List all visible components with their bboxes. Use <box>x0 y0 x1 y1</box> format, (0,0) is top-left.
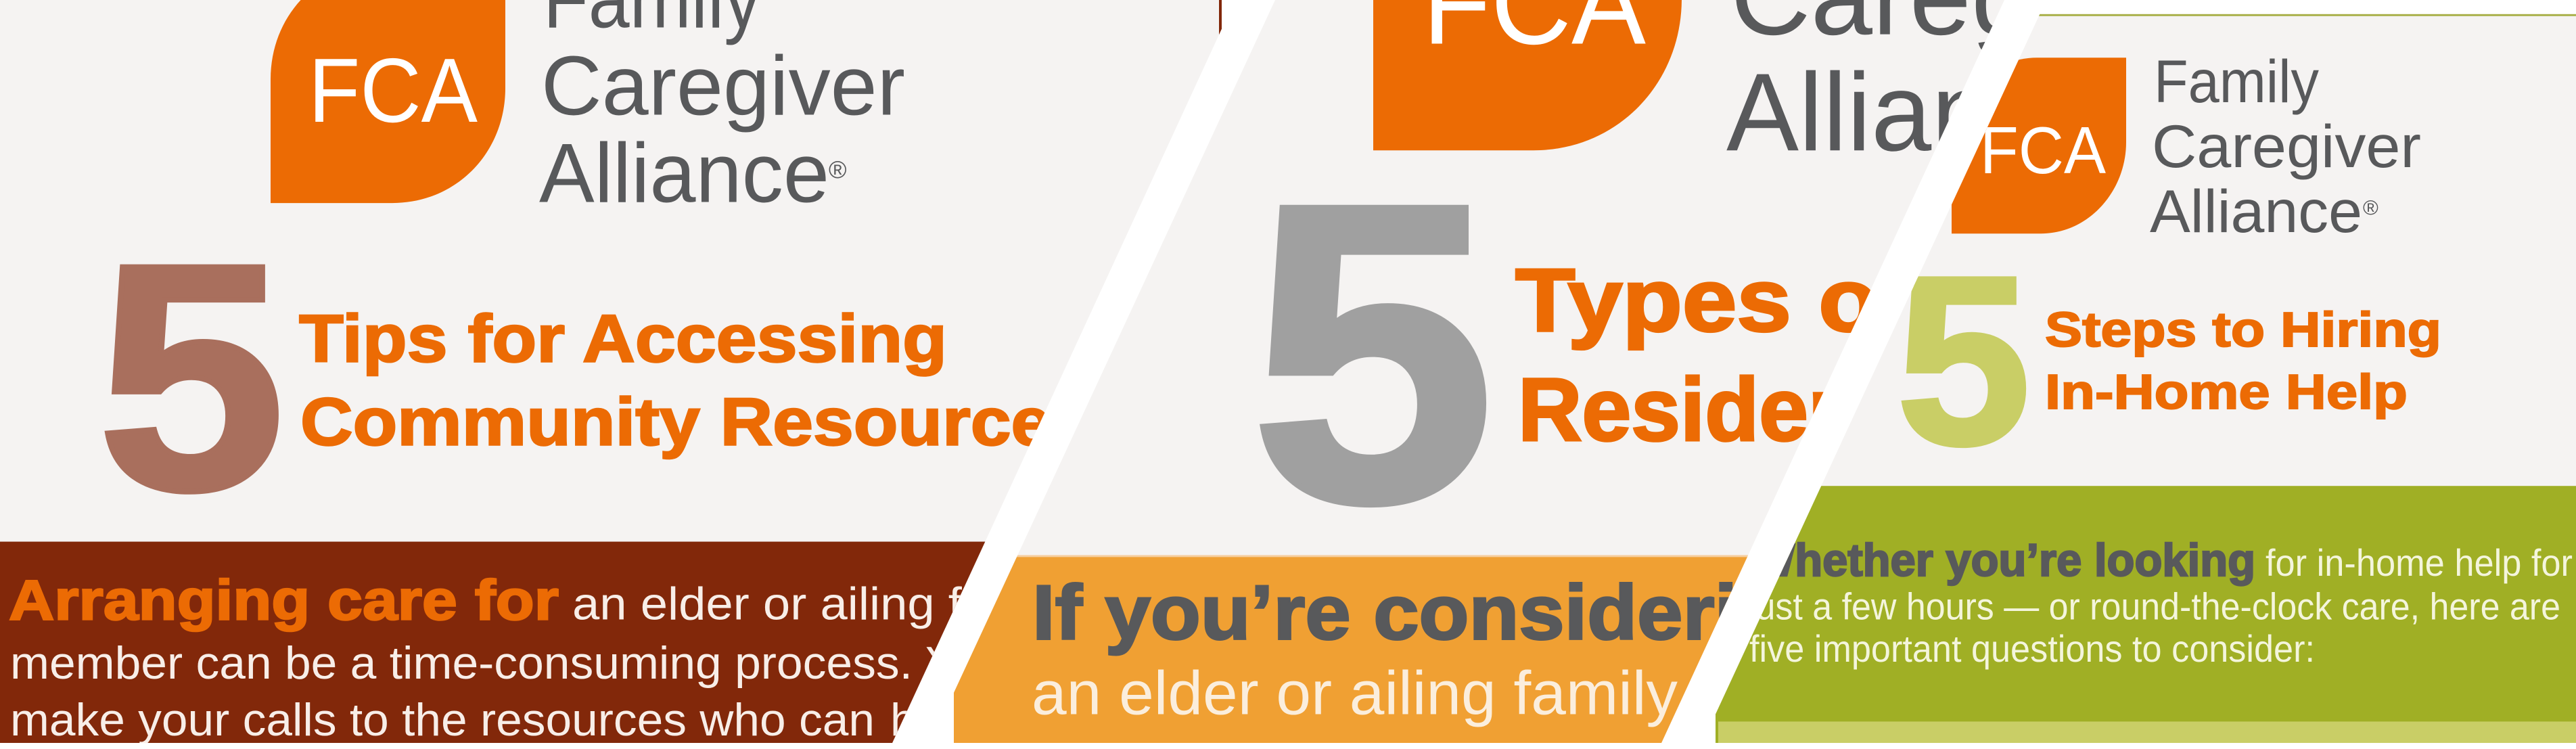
panel: 5 Tips for Accessing Community Resources <box>0 0 1222 746</box>
band: intro text on dark red: Arranging care for <box>9 568 559 632</box>
wordmark <box>539 0 905 220</box>
heading <box>2045 302 2441 419</box>
heading: Community Resources <box>300 385 1092 460</box>
band: intro text on green: Whether you’re looking <box>1752 535 2255 586</box>
wordmark: Alliance <box>2150 178 2362 245</box>
wordmark: Alliance <box>539 127 829 220</box>
icon: orange leaf with FCA: FCA <box>308 39 478 141</box>
band: intro text on dark red: make your calls to the resources who can <box>10 695 875 746</box>
band: intro text on dark red <box>0 541 985 743</box>
heading: Tips for Accessing <box>299 302 947 377</box>
panel: 5 Steps to Hiring In-Home Help <box>1716 14 2576 743</box>
icon: orange leaf with FCA <box>271 0 505 203</box>
band: intro text on dark red: an elder or ailing family <box>572 579 1076 630</box>
heading: Steps to Hiring <box>2045 302 2441 357</box>
wordmark <box>2150 58 2420 233</box>
panel: 5 Types of Residential Care <box>954 0 2004 743</box>
wordmark: Alliance <box>1726 50 2107 174</box>
big numeral 5: 5 <box>97 198 285 558</box>
band: intro text on dark red: You <box>925 638 1003 689</box>
heading: In-Home Help <box>2045 365 2408 419</box>
band: intro text on green <box>1716 486 2576 743</box>
wordmark: ® <box>2363 196 2378 219</box>
logo: FCA leaf and wordmark <box>1373 0 1993 152</box>
wordmark <box>1726 0 1993 152</box>
wordmark: Caregiver <box>2152 112 2421 180</box>
logo: FCA leaf and wordmark <box>1952 58 2420 234</box>
heading: Residential Care <box>1518 360 2211 460</box>
heading: Types of <box>1515 251 1912 350</box>
big numeral 5: 5 <box>1896 226 2031 495</box>
heading <box>299 312 1044 460</box>
band: intro text on green: five important questions to consider: <box>1749 628 2315 670</box>
band: intro text on amber: If you’re considering <box>1032 570 1837 656</box>
icon: orange leaf with FCA <box>1373 0 1682 150</box>
band: intro text on dark red: help <box>890 695 978 746</box>
band: intro text on dark red: member can be a time-consuming process. <box>10 638 913 689</box>
wordmark: Family <box>2154 47 2319 115</box>
big numeral 5: 5 <box>1250 116 1495 590</box>
wordmark: Caregiver <box>541 39 905 133</box>
icon: orange leaf with FCA: FCA <box>1980 113 2106 187</box>
heading <box>1515 268 1870 442</box>
logo: FCA leaf and wordmark <box>271 0 905 220</box>
icon: orange leaf with FCA <box>1952 58 2126 233</box>
band: intro text on amber: an elder or ailing family <box>1032 659 1678 727</box>
band: intro text on amber <box>954 555 1748 743</box>
wordmark: ® <box>829 156 847 183</box>
